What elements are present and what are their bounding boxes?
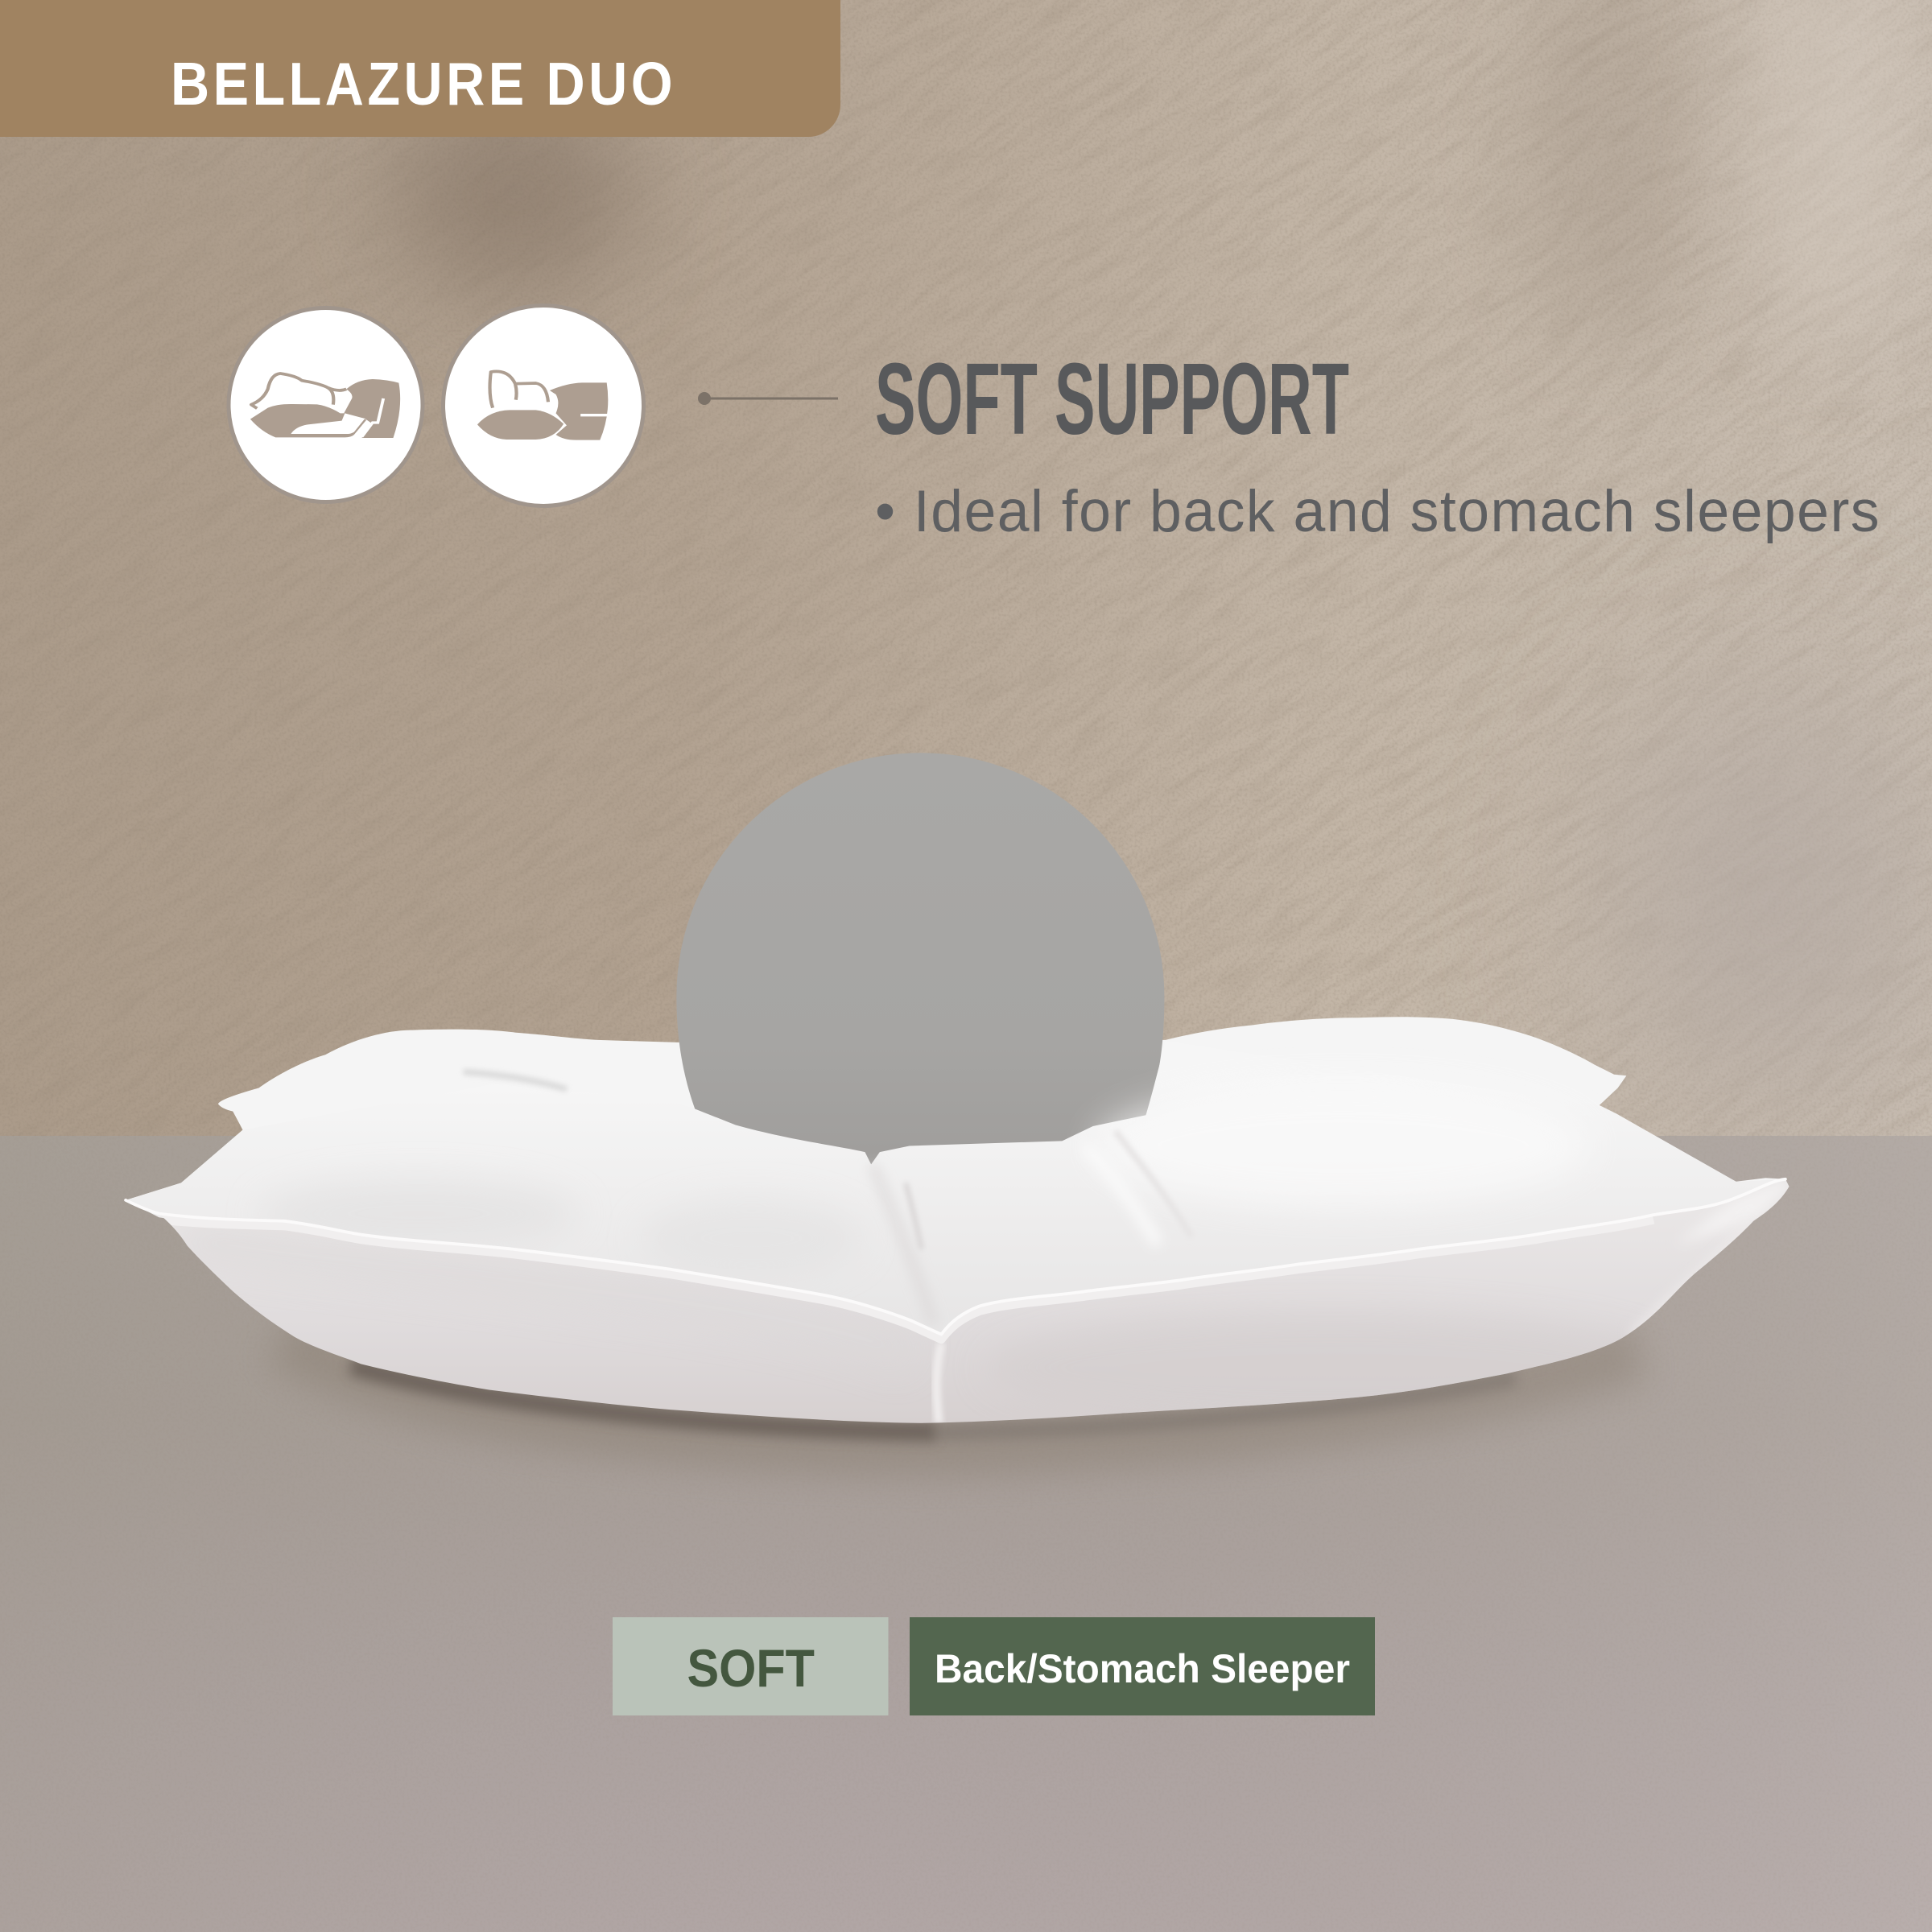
pillow seam xyxy=(126,1179,1785,1335)
feature bullet: • Ideal for back and stomach sleepers xyxy=(875,479,1880,544)
icon: back sleeper xyxy=(229,308,423,502)
pillow front cushions xyxy=(126,1041,1785,1337)
seam lower band xyxy=(159,1220,1653,1340)
connector line xyxy=(698,392,838,405)
grey ball xyxy=(676,753,1164,1170)
brand name: BELLAZURE DUO xyxy=(171,50,676,118)
brand tab xyxy=(0,0,840,137)
pillow back xyxy=(126,1017,1789,1282)
badge: sleeper type: Back/Stomach Sleeper xyxy=(935,1646,1350,1691)
badge: soft: SOFT xyxy=(687,1638,815,1698)
pillow folds and soft shading xyxy=(258,1072,1589,1324)
background wall xyxy=(0,0,1932,1137)
product: pillow with grey ball xyxy=(111,753,1799,1444)
pillow side panel xyxy=(111,1170,1799,1430)
icon: stomach sleeper xyxy=(443,306,644,506)
badge: sleeper type xyxy=(910,1617,1375,1715)
heading: SOFT SUPPORT xyxy=(875,342,1349,456)
background floor xyxy=(0,1136,1932,1932)
pillow shadow on floor xyxy=(283,1337,1639,1444)
badge: soft xyxy=(613,1617,889,1715)
